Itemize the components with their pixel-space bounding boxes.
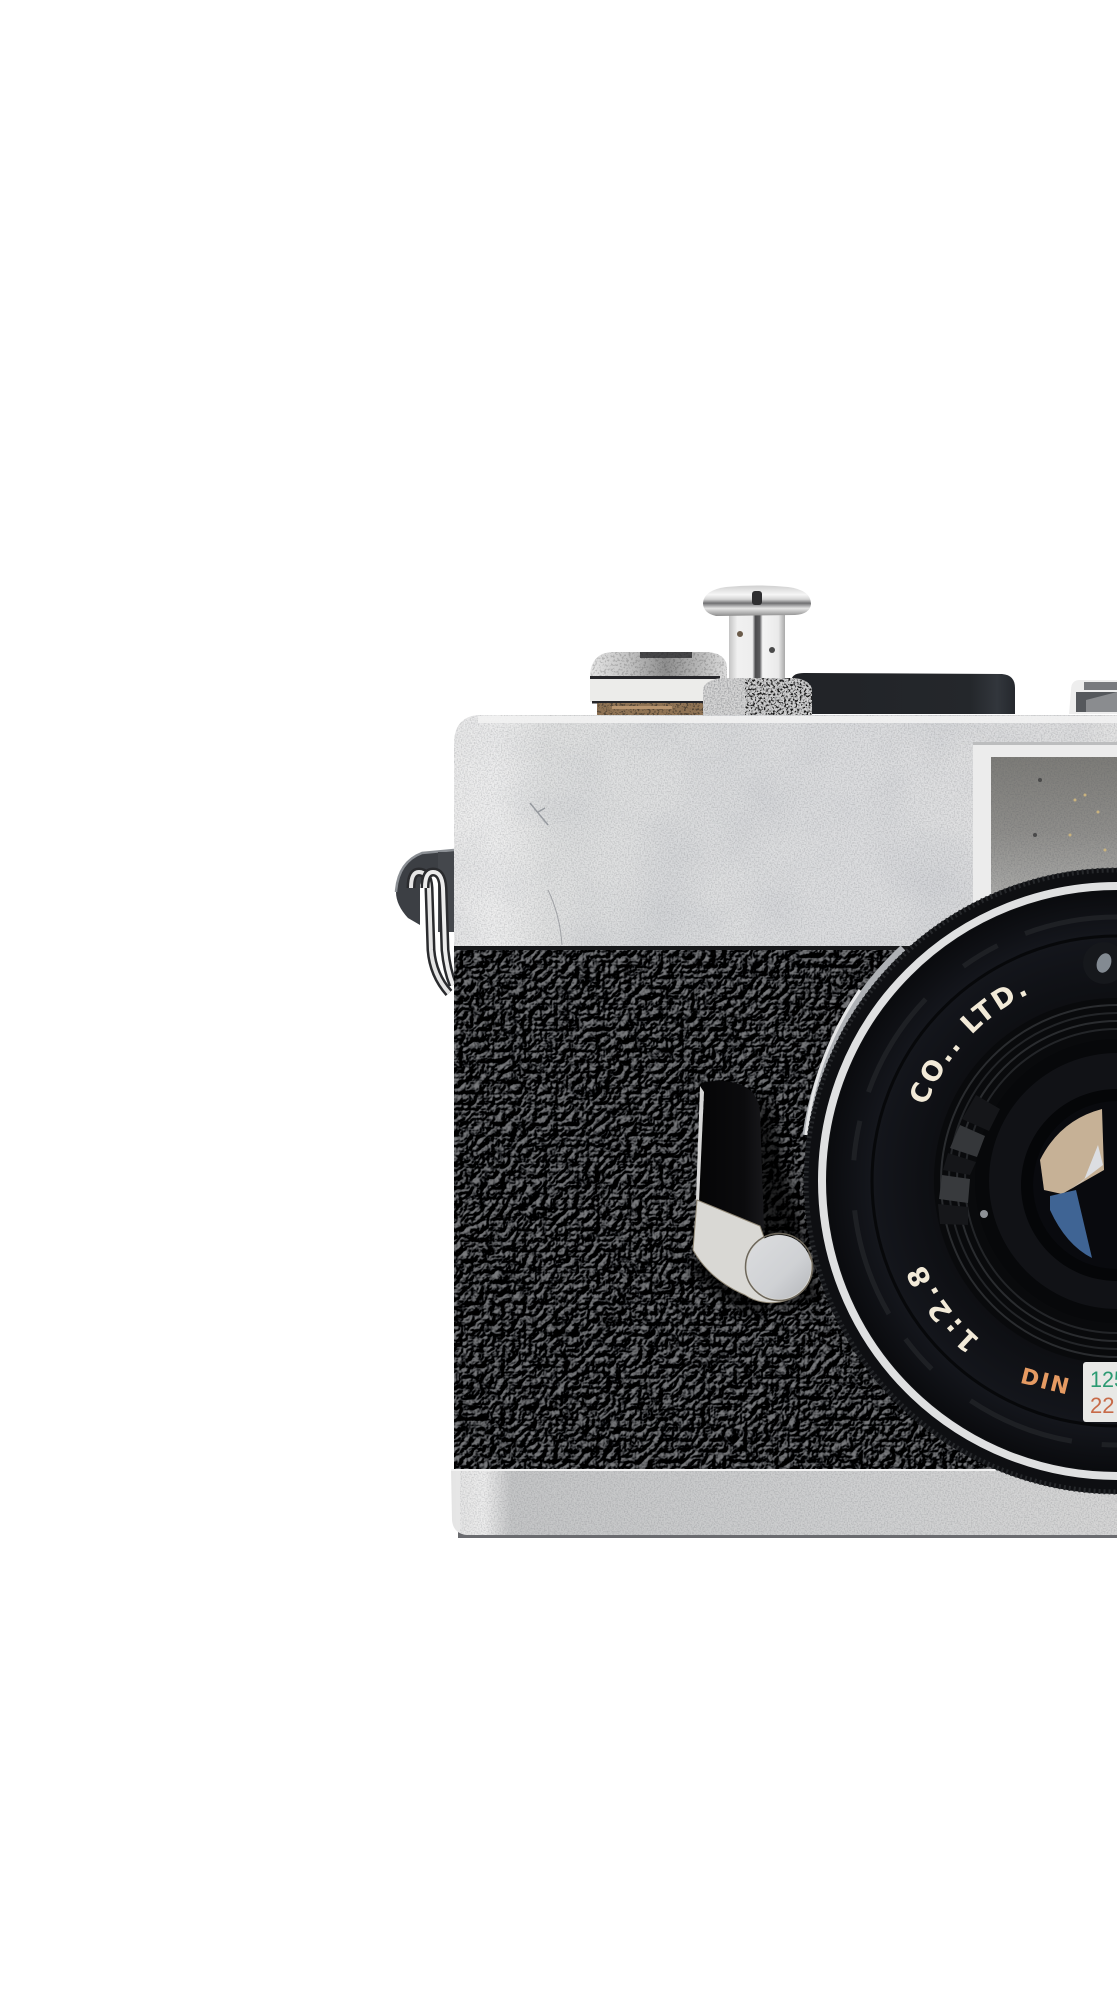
knurled focus grip	[938, 1095, 1000, 1225]
lens face	[827, 891, 1117, 1471]
photo: vintage film camera cropped by the right edge	[394, 586, 1117, 1538]
black leather body covering	[454, 946, 1117, 1470]
viewfinder window	[973, 742, 1117, 907]
groove rings	[853, 917, 1117, 1445]
tan reflection	[1040, 1109, 1104, 1194]
silver bottom plate	[451, 1469, 1117, 1538]
lever silver arm	[693, 1200, 812, 1303]
white trim ring	[822, 886, 1117, 1476]
outer black barrel	[804, 868, 1117, 1494]
strap lug and split ring	[396, 850, 454, 993]
inner ridged barrel	[934, 998, 1117, 1364]
button head	[703, 586, 811, 616]
lens engraving: aperture: 1:2.8	[908, 1267, 978, 1352]
lens engraving: DIN: DIN	[1018, 1364, 1073, 1401]
silver bezel arc	[806, 948, 903, 1135]
small screw	[980, 1210, 988, 1218]
lever round knob	[747, 1235, 811, 1299]
small top-right control	[1069, 680, 1117, 714]
glass element	[1021, 1089, 1117, 1281]
blue reflection	[1050, 1190, 1092, 1258]
button base	[703, 678, 812, 715]
film speed tag	[1083, 1362, 1117, 1422]
shutter button	[703, 586, 812, 715]
lens assembly	[802, 868, 1117, 1494]
film speed tag: 22	[1090, 1393, 1114, 1418]
black hot shoe	[792, 673, 1015, 714]
lever shadow	[690, 1090, 822, 1312]
lens engraving: maker: CO.. LTD.	[911, 987, 1027, 1102]
self-timer lever	[690, 1081, 822, 1312]
lever black handle	[698, 1081, 764, 1228]
button stem	[729, 610, 785, 682]
silver top plate	[454, 715, 1117, 948]
rangefinder eye	[1083, 942, 1117, 984]
film rewind dial	[590, 652, 727, 715]
